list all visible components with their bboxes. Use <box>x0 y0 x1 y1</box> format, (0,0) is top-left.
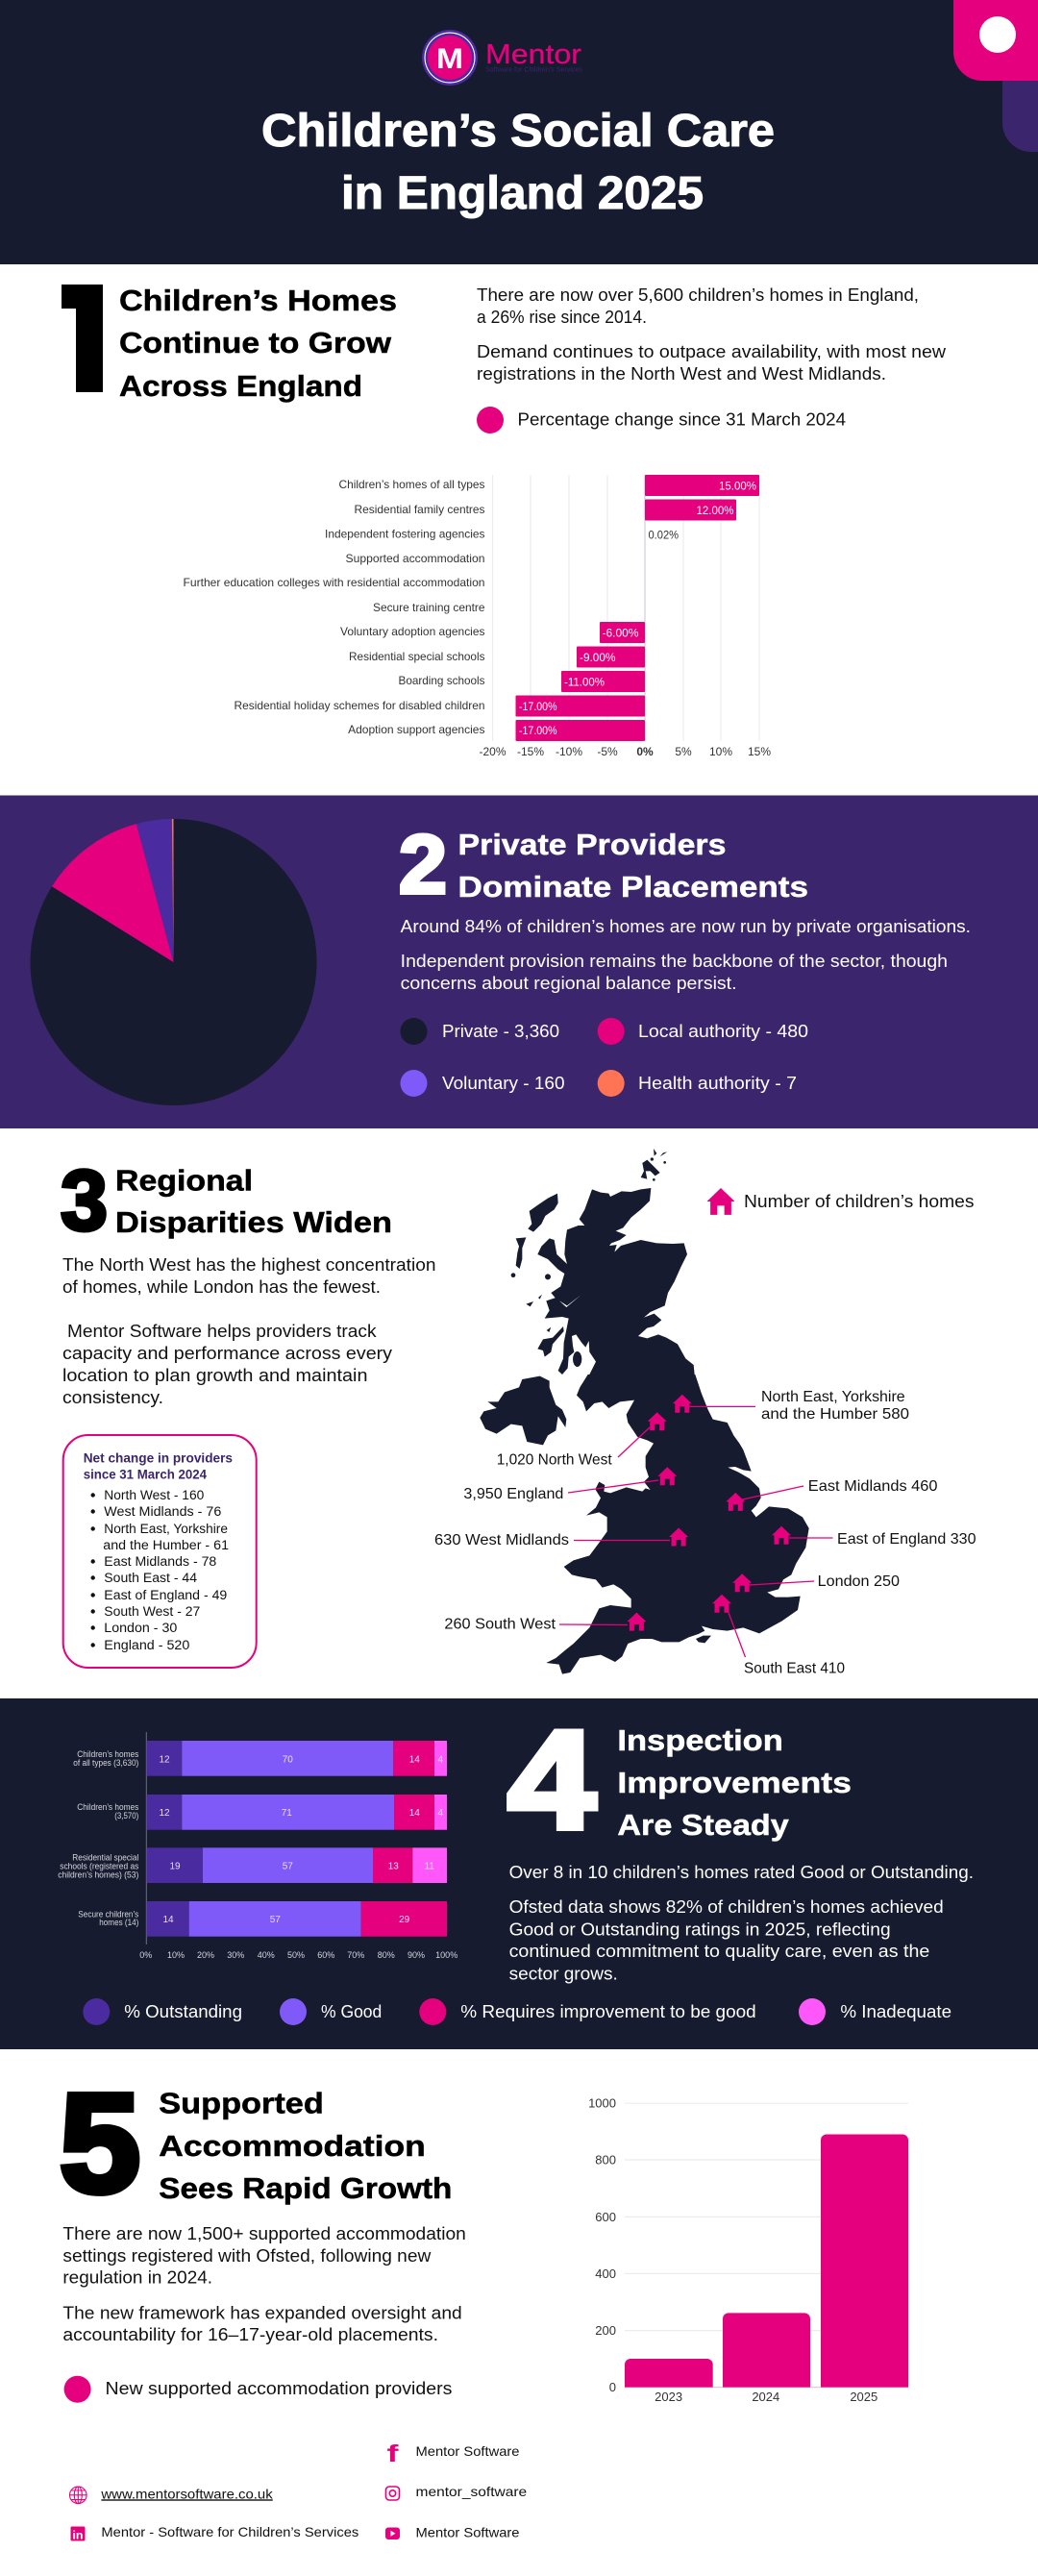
bar chart: percentage change by provider type: Secure training centre <box>373 601 485 614</box>
panel: section 4 inspection improvements <box>0 1698 1038 2049</box>
bar chart: percentage change by provider type: Residential special schools <box>349 650 484 663</box>
callout: net change in providers: London - 30 <box>104 1621 177 1635</box>
text block 2: Around 84% of children’s homes are now run by private organisations. <box>401 917 971 936</box>
number 4: 4 <box>507 1701 596 1858</box>
bar chart: percentage change by provider type: Supported accommodation <box>346 552 484 565</box>
stacked bar chart: inspection ratings: 14 <box>409 1755 420 1765</box>
bar chart: percentage change by provider type: Residential family centres <box>354 503 484 516</box>
logo: Mentor: M <box>436 43 463 75</box>
icon: youtube <box>385 2528 400 2539</box>
callout: net change in providers: South East - 44 <box>104 1571 198 1585</box>
pie chart: provider ownership <box>31 819 317 1105</box>
stacked bar chart: inspection ratings: 20% <box>197 1950 214 1960</box>
stacked bar chart: inspection ratings: (3,570) <box>114 1811 138 1821</box>
stacked bar chart: inspection ratings: 4 <box>438 1755 444 1765</box>
text block 4: sector grows. <box>509 1964 618 1983</box>
legend: new supported accommodation providers: New supported accommodation providers <box>106 2379 452 2398</box>
stacked bar chart: inspection ratings: 13 <box>388 1861 399 1872</box>
stacked bar chart: inspection ratings: Children’s homes <box>77 1749 139 1759</box>
logo: Mentor: Mentor <box>485 39 581 70</box>
bar chart: new providers by year: 200 <box>595 2323 616 2338</box>
callout: net change in providers: North East, Yorkshire <box>104 1522 228 1536</box>
panel: section 3 regional disparities <box>61 1149 976 1676</box>
logo: Mentor <box>422 30 582 86</box>
legend: provider ownership <box>400 1018 808 1097</box>
white dot <box>979 16 1016 53</box>
decorative pink tab <box>953 0 1038 81</box>
stacked bar chart: inspection ratings: 12 <box>159 1755 170 1765</box>
map markers and regional labels: East of England 330 <box>837 1531 976 1548</box>
legend: number of children's homes <box>707 1188 975 1215</box>
heading 5: Accommodation <box>159 2129 426 2163</box>
map markers and regional labels: 630 West Midlands <box>434 1532 569 1548</box>
bar chart: new providers by year <box>588 2096 908 2404</box>
panel: section 5 supported accommodation <box>60 2065 908 2404</box>
text block 3: Mentor Software helps providers track <box>67 1322 378 1341</box>
icon: linkedin <box>71 2526 85 2541</box>
heading 4: Improvements <box>617 1766 852 1799</box>
text block 1: a 26% rise since 2014. <box>477 308 647 327</box>
stacked bar chart: inspection ratings: 12 <box>159 1808 170 1819</box>
text block 1 <box>477 285 947 384</box>
contact: facebook: Mentor Software <box>415 2443 520 2459</box>
text block 3: of homes, while London has the fewest. <box>62 1277 381 1297</box>
legend: inspection ratings: % Requires improvement to be good <box>460 2002 756 2021</box>
bar chart: percentage change by provider type: 10% <box>709 745 732 758</box>
stacked bar chart: inspection ratings: 14 <box>162 1915 174 1925</box>
panel: section 1 children's homes <box>50 256 947 758</box>
heading 4: Inspection <box>617 1723 783 1757</box>
title <box>261 106 775 219</box>
bar chart: new providers by year: 2023 <box>655 2390 682 2404</box>
legend: inspection ratings: % Good <box>321 2002 382 2021</box>
bar chart: new providers by year: 0 <box>609 2380 616 2394</box>
callout: net change in providers: since 31 March 2024 <box>84 1467 207 1482</box>
bar chart: percentage change by provider type: 5% <box>675 745 692 758</box>
number 2: 2 <box>399 819 447 911</box>
bar chart: new providers by year: 400 <box>595 2266 616 2281</box>
map markers and regional labels <box>434 1389 976 1676</box>
legend: provider ownership: Voluntary - 160 <box>442 1074 565 1093</box>
map markers and regional labels: North East, Yorkshire <box>761 1389 905 1405</box>
callout: net change in providers: North West - 160 <box>104 1488 204 1502</box>
text block 3 <box>62 1255 436 1407</box>
icon: instagram <box>386 2487 400 2500</box>
text block 5: The new framework has expanded oversight and <box>62 2303 462 2322</box>
bar chart: new providers by year: 800 <box>595 2153 616 2167</box>
stacked bar chart: inspection ratings: 100% <box>435 1950 457 1960</box>
legend: percentage change <box>477 407 846 433</box>
bar chart: percentage change by provider type: Children’s homes of all types <box>338 478 484 491</box>
stacked bar chart: inspection ratings: 10% <box>167 1950 185 1960</box>
bar chart: percentage change by provider type: 15% <box>748 745 771 758</box>
legend: provider ownership: Private - 3,360 <box>442 1022 559 1041</box>
stacked bar chart: inspection ratings: 50% <box>287 1950 305 1960</box>
heading 1 <box>119 284 397 403</box>
heading 5 <box>159 2086 452 2205</box>
bar chart: percentage change by provider type: -10% <box>556 745 582 758</box>
map: United Kingdom <box>480 1149 809 1674</box>
stacked bar chart: inspection ratings: 70% <box>347 1950 364 1960</box>
stacked bar chart: inspection ratings: 80% <box>378 1950 395 1960</box>
bar chart: percentage change by provider type: 0% <box>636 745 654 758</box>
bar chart: percentage change by provider type: -11.00% <box>564 675 605 688</box>
contact: instagram: mentor_software <box>415 2484 527 2499</box>
number 5: 5 <box>60 2065 140 2221</box>
bar chart: percentage change by provider type <box>183 475 771 758</box>
icon: linkedin: in <box>73 2528 83 2541</box>
stacked bar chart: inspection ratings: homes (14) <box>99 1918 138 1927</box>
stacked bar chart: inspection ratings: children’s homes) (53) <box>58 1870 138 1879</box>
legend: inspection ratings <box>83 1998 952 2025</box>
text block 1: registrations in the North West and West Midlands. <box>477 364 886 384</box>
stacked bar chart: inspection ratings <box>58 1732 457 1960</box>
legend: provider ownership: Health authority - 7 <box>638 1074 797 1093</box>
text block 4: continued commitment to quality care, even as the <box>509 1942 929 1961</box>
stacked bar chart: inspection ratings: 0% <box>139 1950 152 1960</box>
stacked bar chart: inspection ratings: 29 <box>399 1915 410 1925</box>
heading 1: Children’s Homes <box>119 284 397 317</box>
callout: net change in providers: West Midlands - 76 <box>104 1504 221 1519</box>
bar chart: percentage change by provider type: Voluntary adoption agencies <box>340 625 484 638</box>
text block 2: Independent provision remains the backbone of the sector, though <box>401 952 948 971</box>
text block 4: Over 8 in 10 children’s homes rated Good or Outstanding. <box>509 1863 974 1882</box>
decorative purple tab <box>1002 81 1038 152</box>
bar chart: percentage change by provider type: Boarding schools <box>398 674 484 687</box>
text block 3: location to plan growth and maintain <box>62 1366 367 1385</box>
heading 1: Continue to Grow <box>119 326 392 359</box>
stacked bar chart: inspection ratings: 90% <box>408 1950 425 1960</box>
number 3: 3 <box>61 1152 108 1248</box>
bar chart: new providers by year: 1000 <box>588 2096 616 2111</box>
bar chart: new providers by year: 600 <box>595 2210 616 2224</box>
stacked bar chart: inspection ratings: Children’s homes <box>77 1802 139 1812</box>
bar chart: percentage change by provider type: -17.00% <box>519 700 557 713</box>
text block 2 <box>401 917 971 993</box>
map markers and regional labels: East Midlands 460 <box>808 1478 938 1495</box>
stacked bar chart: inspection ratings: 57 <box>283 1861 293 1872</box>
stacked bar chart: inspection ratings: schools (registered as <box>60 1861 139 1870</box>
bar chart: percentage change by provider type: Adoption support agencies <box>348 723 484 736</box>
text block 2: concerns about regional balance persist. <box>401 974 736 993</box>
callout: net change in providers: East Midlands - 78 <box>104 1554 216 1569</box>
stacked bar chart: inspection ratings: 71 <box>282 1808 292 1819</box>
bar chart: percentage change by provider type: Further education colleges with residential accommodation <box>183 576 484 589</box>
text block 5: regulation in 2024. <box>62 2268 212 2288</box>
bar chart: percentage change by provider type: -9.00% <box>580 651 616 664</box>
bar chart: percentage change by provider type: -15% <box>517 745 544 758</box>
bar chart: percentage change by provider type: Residential holiday schemes for disabled children <box>235 699 484 712</box>
stacked bar chart: inspection ratings: 30% <box>227 1950 244 1960</box>
stacked bar chart: inspection ratings: 11 <box>425 1861 434 1872</box>
legend: inspection ratings: % Inadequate <box>840 2002 952 2021</box>
map markers and regional labels: 3,950 England <box>463 1486 563 1502</box>
stacked bar chart: inspection ratings: 70 <box>283 1755 293 1765</box>
callout: net change in providers: Net change in providers <box>84 1449 233 1465</box>
bar chart: percentage change by provider type: -17.00% <box>519 724 557 737</box>
legend: new supported accommodation providers <box>64 2376 452 2403</box>
stacked bar chart: inspection ratings: Secure children’s <box>78 1909 139 1919</box>
text block 5: There are now 1,500+ supported accommodation <box>62 2224 466 2243</box>
bar chart: percentage change by provider type: Independent fostering agencies <box>325 527 484 540</box>
stacked bar chart: inspection ratings: 60% <box>317 1950 334 1960</box>
stacked bar chart: inspection ratings: 4 <box>438 1808 444 1819</box>
callout: net change in providers: and the Humber - 61 <box>103 1538 229 1552</box>
heading 2: Dominate Placements <box>457 870 808 904</box>
text block 5: settings registered with Ofsted, following new <box>62 2246 432 2266</box>
callout: net change in providers <box>63 1435 257 1668</box>
text block 3: capacity and performance across every <box>62 1344 392 1363</box>
map markers and regional labels: London 250 <box>818 1573 900 1590</box>
text block 3: consistency. <box>62 1388 163 1407</box>
legend: percentage change: Percentage change since 31 March 2024 <box>517 409 846 429</box>
bar chart: percentage change by provider type: -6.00% <box>602 627 639 640</box>
heading 3: Regional <box>115 1163 253 1198</box>
heading 5: Supported <box>159 2086 324 2119</box>
contact: linkedin: Mentor - Software for Children’s Services <box>101 2524 358 2539</box>
text block 5: accountability for 16–17-year-old placements. <box>62 2325 438 2344</box>
text block 3: The North West has the highest concentration <box>62 1255 436 1275</box>
map markers and regional labels: and the Humber 580 <box>761 1406 909 1423</box>
heading 2: Private Providers <box>457 828 727 861</box>
text block 5 <box>62 2224 466 2344</box>
panel: header <box>0 0 1038 264</box>
logo: Mentor: Software for Children's Services <box>485 65 582 73</box>
stacked bar chart: inspection ratings: 40% <box>258 1950 275 1960</box>
text block 4: Good or Outstanding ratings in 2025, reflecting <box>509 1920 891 1939</box>
legend: number of children's homes: Number of children’s homes <box>744 1192 975 1211</box>
bar chart: new providers by year: 2025 <box>850 2390 877 2404</box>
heading 3 <box>115 1163 392 1239</box>
heading 4 <box>617 1723 852 1842</box>
callout: net change in providers: South West - 27 <box>104 1604 200 1619</box>
heading 3: Disparities Widen <box>115 1205 392 1239</box>
panel: footer contacts <box>69 2440 527 2541</box>
text block 1: There are now over 5,600 children’s homes in England, <box>477 285 919 305</box>
text block 4 <box>509 1863 974 1983</box>
title: Children’s Social Care <box>261 106 775 157</box>
stacked bar chart: inspection ratings: Residential special <box>72 1853 138 1863</box>
heading 2 <box>457 828 808 904</box>
text block 4: Ofsted data shows 82% of children’s homes achieved <box>509 1897 944 1917</box>
title: in England 2025 <box>341 168 704 219</box>
bar chart: percentage change by provider type: 0.02% <box>648 529 679 542</box>
bar chart: percentage change by provider type: 12.00% <box>696 504 734 517</box>
callout: net change in providers: England - 520 <box>104 1638 189 1652</box>
stacked bar chart: inspection ratings: 14 <box>409 1808 420 1819</box>
legend: inspection ratings: % Outstanding <box>124 2002 242 2021</box>
panel: section 2 private providers <box>0 796 1038 1128</box>
contact: website: www.mentorsoftware.co.uk <box>100 2486 274 2501</box>
stacked bar chart: inspection ratings: 19 <box>169 1861 181 1872</box>
map markers and regional labels: South East 410 <box>744 1661 845 1676</box>
bar chart: percentage change by provider type: -20% <box>479 745 507 758</box>
heading 4: Are Steady <box>617 1808 790 1842</box>
number 1: 1 <box>50 256 135 425</box>
legend: provider ownership: Local authority - 480 <box>638 1022 808 1041</box>
bar chart: percentage change by provider type: 15.00% <box>719 479 756 492</box>
text block 1: Demand continues to outpace availability, with most new <box>477 342 947 361</box>
heading 5: Sees Rapid Growth <box>159 2171 452 2205</box>
map markers and regional labels: 1,020 North West <box>497 1452 612 1469</box>
callout: net change in providers: East of England - 49 <box>104 1588 227 1602</box>
stacked bar chart: inspection ratings: of all types (3,630) <box>73 1758 138 1768</box>
icon: globe <box>69 2487 86 2504</box>
bar chart: new providers by year: 2024 <box>752 2390 779 2404</box>
heading 1: Across England <box>119 369 362 403</box>
stacked bar chart: inspection ratings: 57 <box>270 1915 281 1925</box>
bar chart: percentage change by provider type: -5% <box>597 745 618 758</box>
icon: facebook: f <box>386 2440 399 2467</box>
map markers and regional labels: 260 South West <box>444 1617 556 1633</box>
contact: youtube: Mentor Software <box>415 2524 520 2539</box>
